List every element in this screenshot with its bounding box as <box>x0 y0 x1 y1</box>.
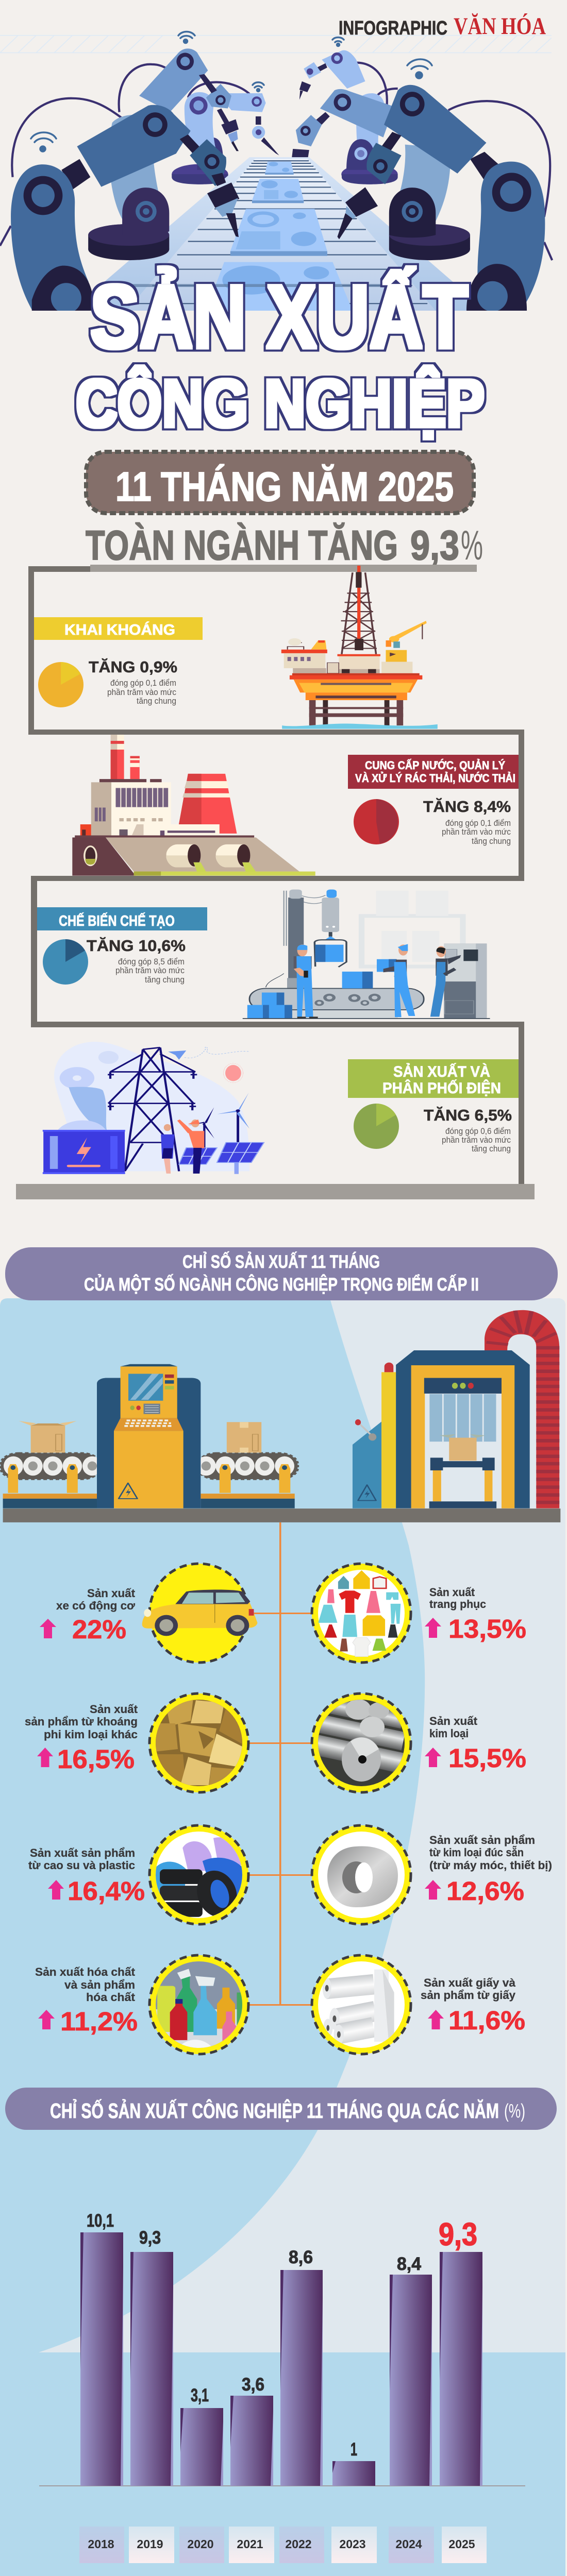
bar 2023 <box>332 2439 375 2486</box>
arrow up <box>37 1748 53 1767</box>
panel: khai khoáng: đóng góp 0,1 điểm <box>110 678 176 688</box>
arrow up <box>425 1880 441 1900</box>
bar 2024: 8,4 <box>397 2254 422 2274</box>
banner: chỉ số sản xuất công nghiệp qua các năm <box>5 2088 557 2130</box>
bar 2019: 9,3 <box>139 2228 161 2248</box>
panel: khai khoáng: tăng chung <box>137 696 176 706</box>
pie: chế biến chế tạo <box>43 939 88 985</box>
bar 2024 <box>390 2254 432 2486</box>
top logo <box>339 13 546 40</box>
year labels: 2020 <box>187 2537 214 2551</box>
item: sản phẩm từ cao su và plastic: 16,4% <box>68 1876 145 1906</box>
illustration: power tower, wind turbines and solar panels <box>43 1042 264 1174</box>
item: xe có động cơ: Sản xuất <box>87 1587 136 1600</box>
item: kim loại <box>306 1693 526 1792</box>
icon: wifi signals <box>31 32 432 151</box>
headline: toàn ngành tăng 9,3%: TOÀN NGÀNH TĂNG <box>86 522 398 569</box>
bar 2023: 1 <box>351 2439 357 2460</box>
bar 2021: 3,6 <box>242 2375 264 2395</box>
item: sản phẩm từ khoáng phi kim loại khác: sản phẩm từ khoáng <box>25 1715 138 1728</box>
banner: chỉ số sản xuất 11 tháng: CỦA MỘT SỐ NGÀNH CÔNG NGHIỆP TRỌNG ĐIỂM CẤP II <box>84 1274 479 1295</box>
year labels: 2021 <box>237 2537 263 2551</box>
panel: chế biến chế tạo: phần trăm vào mức <box>115 965 185 975</box>
top logo: VĂN HÓA <box>454 13 546 40</box>
panel: khai khoáng: phần trăm vào mức <box>107 687 176 697</box>
headline: toàn ngành tăng 9,3%: % <box>461 522 483 569</box>
item: xe có động cơ: 22% <box>72 1615 126 1644</box>
bar 2021 <box>230 2375 273 2486</box>
item: sản phẩm từ kim loại đúc sẵn <box>312 1825 552 1924</box>
icon: car <box>142 1564 257 1663</box>
bar 2020 <box>180 2385 223 2486</box>
arrow up <box>425 1748 441 1767</box>
subtitle pill: 11 tháng năm 2025 <box>86 452 474 513</box>
image: steel coil <box>312 1825 411 1924</box>
panel: sản xuất và phân phối điện <box>348 1059 519 1154</box>
bar 2022 <box>280 2247 323 2486</box>
image: chemical bottles <box>149 1955 248 2054</box>
bar 2022: 8,6 <box>289 2247 313 2267</box>
item: giấy: sản phẩm từ giấy <box>421 1989 515 2002</box>
item: trang phục: Sản xuất <box>429 1586 475 1599</box>
image: tires and plastic <box>149 1825 248 1924</box>
panel: sản xuất và phân phối điện: TĂNG 6,5% <box>424 1106 512 1124</box>
panel: cung cấp nước: đóng góp 0,1 điểm <box>445 818 511 828</box>
image: paper rolls <box>312 1955 411 2054</box>
pie: khai khoáng <box>38 662 84 707</box>
image: aluminium rolls <box>306 1693 414 1792</box>
item: giấy <box>312 1955 525 2054</box>
illustration: robot arms over conveyor belt <box>0 36 552 313</box>
item: hóa chất <box>35 1955 248 2054</box>
banner: chỉ số sản xuất 11 tháng: CHỈ SỐ SẢN XUẤT 11 THÁNG <box>182 1251 380 1272</box>
illustration: oil rig <box>281 566 438 729</box>
year labels: 2025 <box>448 2537 475 2551</box>
illustration: factory workers and conveyor <box>243 890 490 1019</box>
item: giấy: 11,6% <box>448 2006 525 2035</box>
bar 2025: 9,3 <box>439 2217 477 2252</box>
panel: khai khoáng: TĂNG 0,9% <box>89 658 177 676</box>
item: giấy: Sản xuất giấy và <box>424 1976 515 1989</box>
blue background panel <box>0 1298 565 2576</box>
panel: cung cấp nước: CUNG CẤP NƯỚC, QUẢN LÝ <box>365 759 505 772</box>
year labels: 2019 <box>137 2537 163 2551</box>
item: hóa chất: 11,2% <box>60 2007 138 2036</box>
bar chart: chỉ số 2018-2025 <box>39 2211 525 2486</box>
item: hóa chất: Sản xuất hóa chất <box>35 1965 136 1978</box>
item: trang phục <box>312 1564 526 1663</box>
item: trang phục: 13,5% <box>448 1614 526 1643</box>
panel: chế biến chế tạo: tăng chung <box>145 975 185 985</box>
illustration: factory with waste pipes <box>72 735 315 876</box>
banner: chỉ số sản xuất 11 tháng <box>5 1247 558 1300</box>
zigzag frame <box>16 565 535 1199</box>
bar 2020: 3,1 <box>191 2385 209 2405</box>
year labels: 2024 <box>395 2537 422 2551</box>
item: sản phẩm từ kim loại đúc sẵn: (trừ máy móc, thiết bị) <box>429 1859 552 1872</box>
banner: chỉ số sản xuất công nghiệp qua các năm: (%) <box>504 2100 525 2122</box>
item: sản phẩm từ khoáng phi kim loại khác: phi kim loại khác <box>44 1728 138 1741</box>
panel: khai khoáng: KHAI KHOÁNG <box>64 621 175 638</box>
image: gold rocks <box>149 1693 248 1792</box>
connector lines <box>249 1522 311 2006</box>
item: sản phẩm từ cao su và plastic: từ cao su và plastic <box>28 1859 135 1872</box>
item: sản phẩm từ cao su và plastic: Sản xuất sản phẩm <box>30 1846 135 1859</box>
item: sản phẩm từ khoáng phi kim loại khác: Sản xuất <box>90 1703 138 1716</box>
panel: chế biến chế tạo <box>37 907 207 985</box>
item: sản phẩm từ kim loại đúc sẵn: 12,6% <box>446 1876 524 1906</box>
icon: clothes <box>312 1564 411 1663</box>
arrow up <box>425 1618 441 1638</box>
headline: toàn ngành tăng 9,3%: 9,3 <box>410 522 459 569</box>
pie: cung cấp nước <box>354 799 399 844</box>
panel: cung cấp nước <box>348 755 519 846</box>
item: sản phẩm từ khoáng phi kim loại khác <box>25 1693 248 1792</box>
item: sản phẩm từ cao su và plastic <box>28 1825 248 1924</box>
top logo: INFOGRAPHIC <box>339 18 447 39</box>
panel: cung cấp nước: VÀ XỬ LÝ RÁC THẢI, NƯỚC THẢI <box>355 772 515 785</box>
item: kim loại: Sản xuất <box>429 1715 478 1727</box>
panel: cung cấp nước: TĂNG 8,4% <box>423 798 511 816</box>
bar 2018 <box>80 2211 123 2486</box>
panel: sản xuất và phân phối điện: PHÂN PHỐI ĐIỆN <box>382 1079 501 1097</box>
item: trang phục: trang phục <box>429 1598 486 1611</box>
title: SẢN XUẤT <box>90 267 468 367</box>
bar 2025 <box>439 2217 482 2486</box>
year labels: 2018 <box>88 2537 114 2551</box>
item: xe có động cơ: xe có động cơ <box>56 1599 135 1612</box>
year labels <box>79 2527 487 2563</box>
item: hóa chất: hóa chất <box>86 1991 136 2004</box>
arrow up <box>38 2010 55 2029</box>
pie: điện <box>354 1104 399 1149</box>
item: sản phẩm từ kim loại đúc sẵn: từ kim loại đúc sẵn <box>429 1846 524 1859</box>
panel: cung cấp nước: tăng chung <box>472 836 511 846</box>
subtitle pill: 11 tháng năm 2025: 11 THÁNG NĂM 2025 <box>115 464 454 510</box>
bar 2019 <box>130 2228 173 2486</box>
arrow up <box>48 1880 64 1900</box>
panel: khai khoáng <box>34 617 203 707</box>
item: kim loại: 15,5% <box>448 1743 526 1773</box>
illustration: conveyor machine and press machine <box>1 1310 560 1522</box>
item: kim loại: kim loại <box>429 1727 469 1740</box>
bar 2018: 10,1 <box>87 2211 114 2231</box>
panel: sản xuất và phân phối điện: tăng chung <box>472 1144 511 1154</box>
panel: sản xuất và phân phối điện: đóng góp 0,6 điểm <box>445 1126 511 1136</box>
item: sản phẩm từ khoáng phi kim loại khác: 16,5% <box>57 1744 135 1774</box>
arrow up <box>428 2010 444 2029</box>
panel: chế biến chế tạo: TĂNG 10,6% <box>87 937 186 955</box>
item: hóa chất: và sản phẩm <box>64 1978 135 1991</box>
panel: sản xuất và phân phối điện: phần trăm vào mức <box>442 1135 511 1145</box>
item: xe có động cơ <box>40 1564 257 1663</box>
item: sản phẩm từ kim loại đúc sẵn: Sản xuất sản phẩm <box>429 1834 535 1846</box>
panel: cung cấp nước: phần trăm vào mức <box>442 827 511 837</box>
title <box>76 267 485 441</box>
panel: chế biến chế tạo: đóng góp 8,5 điểm <box>118 957 185 967</box>
title: CÔNG NGHIỆP <box>76 365 485 441</box>
panel: sản xuất và phân phối điện: SẢN XUẤT VÀ <box>393 1063 490 1080</box>
year labels: 2023 <box>339 2537 366 2551</box>
arrow up <box>40 1619 56 1638</box>
year labels: 2022 <box>285 2537 312 2551</box>
panel: chế biến chế tạo: CHẾ BIẾN CHẾ TẠO <box>59 912 175 929</box>
